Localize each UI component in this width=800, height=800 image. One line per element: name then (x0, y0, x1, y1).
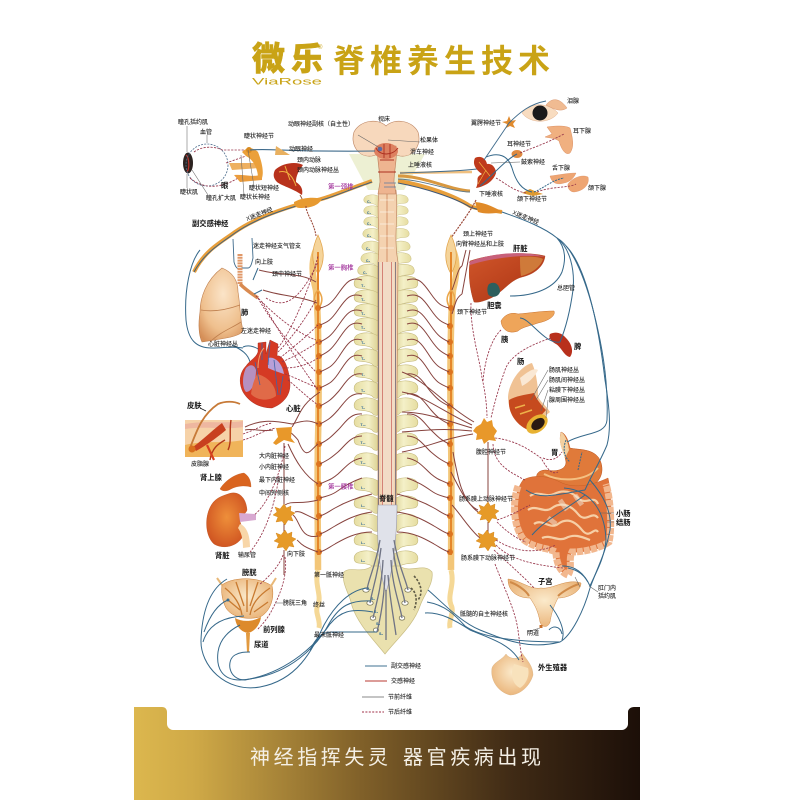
nerves from spine to left chain (320, 279, 372, 552)
labels: left pelvis: 第一骶神经 (314, 571, 344, 579)
labels: right abdomen: 阴道 (527, 629, 539, 637)
labels: right abdomen (457, 284, 631, 672)
labels: right head: 肝脏 (513, 244, 528, 253)
right sympathetic chain (446, 235, 456, 628)
labels: left thorax and abdomen (187, 270, 394, 560)
vertebra labels: T₁₂ (360, 461, 366, 465)
labels: left thorax and abdomen: 肾上腺 (200, 473, 223, 482)
vertebra labels: L₃ (361, 522, 365, 526)
labels: right head: 鼓索神经 (521, 158, 545, 166)
spine: vertebral column (343, 190, 432, 654)
labels: right abdomen: 脾 (574, 342, 582, 351)
right cranial glands and ganglia (474, 100, 588, 196)
labels: right abdomen: 肠肌神经丛 (549, 366, 579, 374)
cauda equina (377, 505, 397, 592)
labels: right abdomen: 小肠 (616, 509, 631, 518)
labels: left head: 瞳孔括约肌 (178, 118, 208, 126)
submandibular gland (568, 176, 588, 192)
labels: left pelvis: 膀胱三角 (283, 599, 307, 607)
labels: left thorax and abdomen: 中间外侧核 (259, 489, 289, 497)
labels: right head: 泪腺 (567, 97, 579, 105)
labels: right abdomen: 腺周围神经丛 (549, 396, 585, 404)
dashed post-ganglionic nerves: lung and heart (256, 256, 318, 405)
solid sympathetic branches from left chain (245, 270, 320, 575)
adrenal gland (220, 473, 251, 491)
labels: right abdomen: 肠 (517, 357, 524, 366)
spleen (549, 333, 572, 357)
submandibular ganglion (522, 189, 543, 196)
labels: left thorax and abdomen: 左迷走神经 (241, 327, 271, 335)
intestine cross-section (508, 363, 551, 438)
vertebra labels: S₁ (367, 587, 371, 591)
vertebra labels: T₁ (361, 284, 365, 288)
legend: 副交感神经 (391, 662, 421, 670)
labels: left thorax and abdomen: 肾脏 (215, 551, 230, 560)
labels: right head: 翼腭神经节 (471, 119, 501, 127)
vertebra labels: T₆ (361, 357, 365, 361)
labels: right head: 颈上神经节 (463, 230, 493, 238)
labels: left thorax and abdomen: 最下内脏神经 (259, 476, 295, 484)
labels: left thorax and abdomen: 皮肤 (187, 401, 202, 410)
kidney (207, 446, 285, 552)
labels: right abdomen: 肠系膜下动脉神经节 (461, 554, 515, 562)
vertebra labels: L₄ (361, 541, 365, 545)
vertebra labels (360, 200, 383, 636)
slogan: 神经指挥失灵 (250, 746, 392, 769)
labels: right head: 上唾液核 (408, 161, 432, 169)
labels: left pelvis: 膀胱 (242, 568, 257, 577)
labels: right abdomen: 胆囊 (487, 301, 502, 310)
labels: left head: 睫状肌 (180, 188, 198, 196)
labels: left head: 向上肢 (255, 258, 273, 266)
salivary nuclei (474, 157, 496, 188)
labels: right abdomen: 粘膜下神经丛 (549, 386, 585, 394)
vertebra labels: L₅ (361, 559, 365, 563)
left carotid plexus (274, 163, 306, 208)
labels: right head: X迷走神经 (511, 208, 540, 226)
labels: left head: 迷走神经支气管支 (253, 242, 301, 250)
left lung and trachea (199, 238, 258, 342)
labels: left head (178, 115, 390, 272)
otic ganglion (512, 150, 522, 158)
labels: left thorax and abdomen: 脊髓 (379, 494, 394, 503)
labels: left head: 第一颈椎 (328, 182, 354, 190)
labels: right abdomen: 肛门内 (598, 584, 616, 592)
labels: left pelvis: 尿道 (254, 640, 269, 649)
labels: left thorax and abdomen: 大内脏神经 (259, 452, 289, 460)
labels: left pelvis (242, 568, 344, 649)
labels: left head: 睫状短神经 (249, 184, 279, 192)
labels: right abdomen: 胃 (551, 448, 558, 457)
vertebra labels: T₇ (361, 373, 365, 377)
vertebra labels: T₈ (361, 389, 365, 393)
vertebra labels: S₄ (376, 622, 380, 626)
cranial nerve connections (480, 101, 576, 193)
external genitalia (492, 653, 533, 695)
bladder, prostate and urethra (217, 578, 276, 652)
labels: left thorax and abdomen: 心脏 (286, 404, 301, 413)
labels: right head: 耳神经节 (507, 140, 531, 148)
labels: left thorax and abdomen: 心脏神经丛 (208, 340, 238, 348)
left sympathetic chain (313, 235, 323, 628)
vertebra labels: T₃ (361, 312, 365, 316)
labels: left head: 眼 (221, 181, 229, 190)
vertebra labels: C₄ (367, 234, 371, 238)
vertebra labels: S₅ (379, 632, 383, 636)
vertebra labels: C₂ (367, 211, 371, 215)
logo: 乐 (291, 41, 323, 77)
legend: 节后纤维 (388, 708, 412, 716)
labels: right head: 滑车神经 (410, 148, 434, 156)
spinal cord (378, 190, 398, 520)
slogan: 器官疾病出现 (403, 746, 545, 769)
labels: right head: 下唾液核 (479, 190, 503, 198)
labels: left head: 第一胸椎 (328, 262, 354, 272)
liver (469, 254, 545, 302)
logo: ® (318, 44, 323, 51)
gallbladder (487, 283, 500, 297)
labels: left pelvis: 前列腺 (263, 625, 286, 634)
brain and brainstem (349, 121, 425, 194)
labels: right abdomen: 总胆管 (557, 284, 575, 292)
legend: 交感神经 (391, 677, 415, 685)
right vagal and pelvic parasympathetic nerves (425, 212, 610, 660)
labels: right abdomen: 括约肌 (598, 592, 616, 600)
vagus trunks: right (398, 169, 503, 238)
logo (252, 40, 323, 88)
nerves from spine to right chain (397, 279, 449, 552)
labels: left head: 动眼神经 (289, 145, 313, 153)
labels: left pelvis: 终丝 (313, 601, 325, 609)
labels: right head: 颌下神经节 (517, 195, 547, 203)
labels: right abdomen: 胰 (501, 335, 509, 344)
icon: eye (522, 100, 567, 121)
legend: 节前纤维 (388, 693, 412, 701)
labels: right head: 颌下腺 (588, 184, 606, 192)
stomach (537, 432, 602, 489)
labels: left thorax and abdomen: 颈中神经节 (272, 270, 302, 278)
logo: ViaRose (252, 76, 322, 88)
labels: left thorax and abdomen: 小内脏神经 (259, 463, 289, 471)
sacrum (343, 566, 432, 654)
vertebra labels: C₇ (363, 271, 368, 275)
labels: left head: X迷走神经 (245, 205, 274, 223)
left vagus and cardiac plexus (186, 250, 262, 362)
labels: left head: 瞳孔扩大肌 (206, 194, 236, 202)
labels: left head: 血管 (200, 128, 212, 136)
parotid gland (545, 126, 573, 154)
vertebra labels: T₅ (361, 341, 365, 345)
labels: left thorax and abdomen: 第一腰椎 (328, 482, 354, 490)
labels: right abdomen: 肠肌间神经丛 (549, 376, 585, 384)
labels: right abdomen: 颈下神经节 (457, 308, 487, 316)
left eye, orbit and ciliary ganglion (183, 126, 375, 195)
labels: left thorax and abdomen: 输尿管 (238, 551, 256, 559)
labels: right abdomen: 子宫 (538, 577, 553, 586)
vertebra labels: L₁ (361, 486, 365, 490)
vertebra labels: T₉ (361, 406, 365, 410)
labels: right abdomen: 外生殖器 (538, 663, 568, 672)
vertebra labels: C₅ (366, 247, 370, 251)
labels: right head (408, 97, 606, 253)
vagus trunks: left (194, 181, 372, 272)
uterus (508, 579, 581, 628)
vertebra labels: T₂ (361, 298, 365, 302)
skin illustration (185, 402, 276, 460)
labels: right abdomen: 结肠 (616, 518, 631, 527)
pancreas (501, 311, 554, 332)
vertebra labels: C₆ (366, 259, 370, 263)
labels: left pelvis: 最末骶神经 (314, 631, 344, 639)
sublingual gland (550, 173, 576, 184)
logo: 微 (252, 40, 285, 77)
vertebra labels: C₃ (367, 222, 371, 226)
footer banner (134, 707, 640, 800)
heart (240, 340, 290, 408)
labels: left head: 睫状神经节 (244, 132, 274, 140)
labels: right head: 松果体 (420, 136, 438, 144)
vertebra labels: T₄ (361, 326, 365, 330)
right organs (469, 253, 614, 695)
labels: right abdomen: 腹腔神经节 (476, 448, 506, 456)
labels: right head: 向臂神经丛和上肢 (456, 240, 504, 248)
labels: right head: 舌下腺 (552, 164, 570, 172)
labels: left head: 视床 (378, 115, 390, 123)
dashed post-ganglionic nerves: abdomen (471, 303, 563, 662)
labels: left head: 动眼神经副核（自主性） (288, 120, 354, 128)
pterygopalatine ganglion (502, 116, 516, 128)
slogan (250, 746, 545, 769)
vertebra labels: T₁₀ (360, 423, 366, 427)
labels: left thorax and abdomen: 肺 (241, 308, 249, 317)
left pelvic autonomic nerves (201, 555, 377, 688)
labels: right head: 耳下腺 (573, 127, 591, 135)
intestines (514, 476, 614, 575)
labels: left head: 副交感神经 (192, 219, 229, 228)
vertebrae left (354, 195, 380, 568)
labels: right abdomen: 肠系膜上动脉神经节 (459, 495, 513, 503)
vertebra labels: S₃ (374, 610, 378, 614)
legend (362, 662, 421, 716)
vertebrae right (392, 195, 418, 568)
labels: left head: 颈内动脉 (297, 156, 321, 164)
labels: left thorax and abdomen: 皮脂腺 (191, 460, 209, 468)
labels: left head: 颈内动脉神经丛 (297, 166, 339, 174)
labels: left head: 睫状长神经 (240, 193, 270, 201)
left sympathetic ganglia (273, 427, 296, 551)
right sympathetic branches and ganglia (402, 250, 499, 551)
vertebra labels: L₂ (361, 504, 365, 508)
vertebra labels: S₂ (371, 597, 375, 601)
labels: right abdomen: 骶髓的自主神经核 (460, 610, 508, 618)
vertebra labels: T₁₁ (360, 441, 366, 445)
vertebra labels: C₁ (367, 200, 372, 204)
title: 脊椎养生技术 (333, 43, 555, 79)
labels: left thorax and abdomen: 向下肢 (287, 550, 305, 558)
